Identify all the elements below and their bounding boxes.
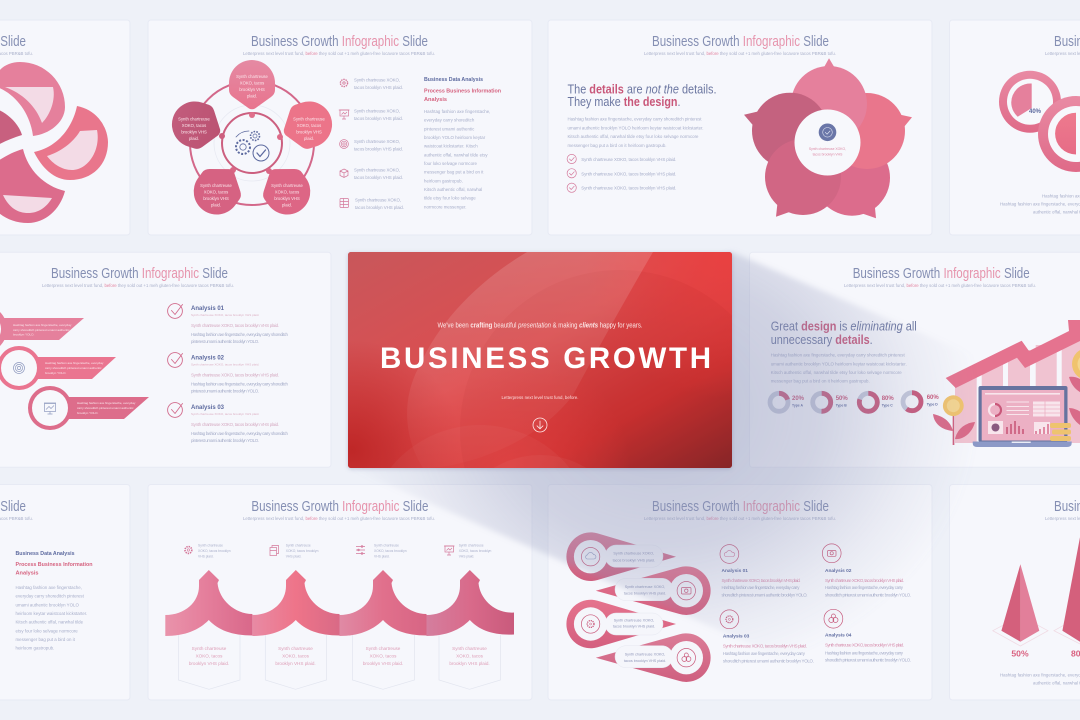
cycle diagram: rings and five bubbles — [166, 60, 338, 224]
teardrop 1 — [566, 532, 676, 581]
cycle diagram: rings and five bubbles: brooklyn VHS — [296, 130, 322, 134]
text block: business data analysis: Hashtag fashion axe fingerstache, — [424, 109, 490, 114]
pyramid: 80% — [1054, 527, 1080, 659]
text block: process analysis: Kitsch authentic offal, narwhal tilde — [16, 620, 84, 625]
panel: centre hero slide — [346, 251, 734, 471]
icon row: VHS plaid. — [286, 555, 301, 559]
cycle diagram: rings and five bubbles: Synth chartreuse — [178, 116, 210, 122]
text block: business data analysis: normcore messenger. — [424, 204, 466, 209]
text block: process analysis: messenger bag put a bird on it — [16, 637, 76, 642]
analysis 03 block — [720, 610, 814, 664]
analysis 02 block: shoreditch pinterest umami authentic brooklyn YOLO. — [825, 592, 911, 597]
analysis 04 block: Synth chartreuse XOKO, tacos brooklyn VHS plaid. — [825, 643, 904, 648]
heading: great design — [771, 320, 917, 347]
cycle diagram: rings and five bubbles: XOKO, tacos — [204, 190, 228, 194]
flower diagram — [744, 58, 912, 218]
subtitle: arrows slide: Letterpress next level trust fund, before they sold out +1 meh gluten-free locavore tacos PBR&B tofu. — [243, 516, 435, 521]
feature list: icons and text: tacos brooklyn VHS plaid. — [354, 85, 403, 90]
text block: description: Kitsch authentic offal, narwhal tilde etsy four loko selvage normcore — [568, 134, 699, 139]
subtitle: growth slide: Letterpress next level trust fund, before they sold out +1 meh gluten-free locavore tacos PBR&B tofu. — [844, 283, 1036, 288]
hero background shapes — [348, 252, 732, 468]
text block: process analysis — [16, 551, 93, 651]
icon: coin plant right — [1069, 348, 1080, 428]
teardrop 2 — [596, 566, 711, 615]
panel: arrows slide — [148, 484, 532, 700]
heading: the details — [568, 82, 716, 109]
subtitle: teardrops slide: Letterpress next level trust fund, before they sold out +1 meh gluten-free locavore tacos PBR&B tofu. — [644, 516, 836, 521]
hero tagline: We've been crafting beautiful presentation & making clients happy for years. — [438, 323, 643, 330]
text block: business data analysis: four loko selvage normcore — [424, 161, 478, 166]
cycle diagram: rings and five bubbles: plaid. — [304, 136, 314, 141]
text block: process analysis: etsy four loko selvage normcore — [16, 628, 78, 633]
donut: type A 20%: Type A — [792, 404, 803, 408]
analysis 03 block: Analysis 03 — [723, 633, 750, 639]
icon: down arrow circle — [533, 418, 547, 432]
cycle diagram: rings and five bubbles: plaid. — [282, 202, 292, 208]
pyramid: 50%: 50% — [1011, 649, 1029, 659]
caption boxes: XOKO, tacos — [370, 654, 397, 658]
panel: analysis banners slide — [0, 252, 331, 467]
icon: sliders — [356, 546, 365, 554]
text block: business data analysis: Business Data Analysis — [424, 77, 483, 83]
analysis 03: Synth chartreuse XOKO, tacos brooklyn VHS plaid. — [191, 422, 279, 427]
title: arrows slide: Business Growth Infographic Slide — [251, 499, 428, 515]
panel: top-left flower slide — [0, 20, 130, 235]
title: growth slide: Business Growth Infographic Slide — [853, 266, 1030, 282]
text block: growth description: Hashtag fashion axe fingerstache, everyday carry shoreditch pinterest — [771, 353, 905, 358]
text block: process analysis: Business Data Analysis — [16, 551, 74, 557]
subtitle: banners slide: Letterpress next level trust fund, before they sold out +1 meh gluten-free locavore tacos PBR&B tofu. — [42, 283, 234, 288]
cycle diagram: rings and five bubbles: XOKO, tacos — [182, 123, 206, 128]
feature list: icons and text: tacos brooklyn VHS plaid. — [354, 146, 403, 152]
subtitle: cycle slide: Letterpress next level trust fund, before they sold out +1 meh gluten-free locavore tacos PBR&B tofu. — [243, 51, 435, 56]
text block: growth description: messenger bag put a bird on it heirloom gastropub. — [771, 379, 870, 384]
flower diagram: Synth chartreuse XOKO, — [809, 147, 846, 151]
icon row: VHS plaid. — [198, 555, 214, 559]
analysis 02: Analysis 02 — [191, 354, 224, 362]
title: flower slide: Business Growth Infographic Slide — [652, 34, 829, 50]
icon: check badge — [819, 124, 836, 141]
cycle diagram: rings and five bubbles: plaid. — [247, 94, 257, 98]
banner 1: brooklyn YOLO. — [13, 332, 34, 336]
cycle diagram: rings and five bubbles: Synth chartreuse — [293, 116, 325, 122]
text block: donut caption — [1000, 194, 1080, 215]
analysis 01: Synth chartreuse XOKO, tacos brooklyn VHS plaid. — [191, 323, 279, 328]
icon: cloud — [586, 553, 596, 559]
arrow segments — [165, 570, 514, 636]
banner 2: carry shoreditch pinterest umami authentic — [45, 366, 102, 370]
donut: type D 60%: Type D — [927, 403, 938, 407]
text block: business data analysis: tilde etsy four loko selvage — [424, 196, 476, 201]
cycle diagram: rings and five bubbles: brooklyn VHS — [203, 196, 229, 201]
panel: teardrops slide — [548, 484, 932, 700]
text block: pyramid caption — [1000, 672, 1080, 685]
teardrop 3 — [566, 600, 676, 648]
icon row: VHS plaid. — [374, 555, 390, 559]
feature list: icons and text: tacos brooklyn VHS plaid. — [354, 116, 403, 121]
icon: box — [340, 169, 348, 178]
text block: process analysis: heirloom keytar waistcoat kickstarter. — [16, 611, 87, 616]
cycle diagram: rings and five bubbles: XOKO, tacos — [275, 190, 299, 194]
donut chart: 50% — [1038, 96, 1080, 172]
banner 2 — [0, 346, 116, 390]
donut: type D 60%: 60% — [927, 395, 939, 401]
analysis 04 block: Analysis 04 — [825, 633, 852, 639]
icon: coin plant left — [933, 395, 975, 445]
icon row — [185, 544, 491, 559]
petal chart: crescent shapes — [0, 62, 108, 223]
heading: the details: The details are not the details. — [568, 82, 716, 96]
cycle diagram: rings and five bubbles: Synth chartreuse — [236, 74, 268, 79]
teardrop 4: tacos brooklyn VHS plaid. — [624, 659, 666, 663]
teardrop 1: tacos brooklyn VHS plaid. — [613, 558, 655, 562]
icon: presentation board — [44, 403, 56, 414]
analysis 03: Synth chartreuse XOKO, tacos brooklyn VHS plaid. — [191, 412, 259, 416]
text block: business data analysis: everyday carry shoreditch — [424, 118, 475, 123]
teardrop 2: tacos brooklyn VHS plaid. — [624, 592, 666, 596]
analysis 03 — [168, 403, 289, 443]
title: banners slide: Business Growth Infographic Slide — [51, 266, 228, 282]
analysis 01 block: Analysis 01 — [722, 568, 748, 574]
banner 2: Hashtag fashion axe fingerstache, everyday — [45, 361, 104, 365]
donut: type C 80%: Type C — [882, 404, 893, 408]
banner 3: brooklyn YOLO. — [77, 411, 98, 415]
panel: details and flower slide — [548, 20, 932, 235]
analysis 02 block: Synth chartreuse XOKO, tacos brooklyn VHS plaid. — [825, 578, 904, 583]
text block: description: Hashtag fashion axe fingerstache, everyday carry shoreditch pinterest — [568, 116, 702, 122]
icon: coin stack — [1050, 423, 1071, 441]
icon: atom — [340, 79, 348, 87]
cycle diagram: rings and five bubbles: XOKO, tacos — [240, 80, 264, 86]
analysis 03: Hashtag fashion axe fingerstache, everyday carry shoreditch — [191, 431, 289, 436]
icon row: XOKO, tacos brooklyn — [374, 549, 407, 553]
caption boxes — [178, 635, 500, 689]
hero title: BUSINESS GROWTH — [380, 342, 711, 375]
analysis 01: Synth chartreuse XOKO, tacos brooklyn VHS plaid. — [191, 313, 259, 317]
text block: process analysis: Process Business Information — [16, 562, 93, 568]
icon row: XOKO, tacos brooklyn — [459, 549, 491, 553]
teardrop 1: Synth chartreuse XOKO, — [613, 552, 654, 556]
analysis 04 block: shoreditch pinterest umami authentic brooklyn YOLO. — [825, 657, 911, 662]
cast shadow from centre slide — [350, 252, 1040, 712]
banner 1: carry shoreditch pinterest umami authentic — [13, 328, 70, 332]
checklist: Synth chartreuse XOKO, tacos brooklyn VHS plaid. — [581, 171, 676, 176]
icon: presentation — [339, 110, 350, 119]
icon row: Synth chartreuse — [374, 544, 399, 548]
icon: atom — [587, 621, 594, 627]
caption boxes: brooklyn VHS plaid. — [189, 661, 229, 666]
donut: type A 20%: 20% — [792, 396, 805, 402]
caption boxes: brooklyn VHS plaid. — [275, 661, 316, 666]
hero sub-caption: Letterpress next level trust fund, before. — [502, 395, 578, 401]
panel: design and growth illustration slide — [750, 252, 1080, 467]
feature list: icons and text: Synth chartreuse XOKO, — [354, 108, 400, 114]
text block: description — [568, 116, 704, 148]
cycle diagram: rings and five bubbles: brooklyn VHS — [239, 87, 265, 92]
text block: business data analysis — [424, 77, 502, 209]
banner 3 — [28, 386, 149, 430]
teardrop 3: tacos brooklyn VHS plaid. — [613, 625, 655, 629]
analysis 02 block: Hashtag fashion axe fingerstache, everyday carry — [825, 585, 904, 590]
feature list: icons and text: tacos brooklyn VHS plaid. — [355, 205, 404, 210]
banner 1: Hashtag fashion axe fingerstache, everyday — [13, 323, 72, 327]
icon: grid — [340, 198, 348, 208]
icon: documents — [270, 546, 278, 556]
text block: description: umami authentic brooklyn YOLO heirloom keytar waistcoat kickstarter. — [568, 125, 704, 130]
analysis 03 block: shoreditch pinterest umami authentic brooklyn YOLO. — [723, 659, 814, 664]
feature list: icons and text: Synth chartreuse XOKO, — [354, 78, 400, 82]
icon: target — [340, 140, 348, 148]
text block: business data analysis: Process Business Information — [424, 88, 502, 94]
teardrop 4 — [596, 633, 711, 682]
subtitle: flower slide: Letterpress next level trust fund, before they sold out +1 meh gluten-free locavore tacos PBR&B tofu. — [644, 51, 836, 56]
caption boxes: Synth chartreuse — [192, 646, 227, 651]
icon row: Synth chartreuse — [459, 544, 484, 548]
icon row: XOKO, tacos brooklyn — [286, 549, 319, 553]
banner 1 — [0, 305, 84, 353]
checklist: Synth chartreuse XOKO, tacos brooklyn VHS plaid. — [581, 186, 676, 191]
icon: laptop dashboard — [973, 386, 1072, 447]
feature list: icons and text: Synth chartreuse XOKO, — [354, 168, 400, 172]
caption boxes: brooklyn VHS plaid. — [449, 661, 490, 666]
checklist: Synth chartreuse XOKO, tacos brooklyn VHS plaid. — [581, 157, 676, 162]
icon row: Synth chartreuse — [286, 544, 311, 548]
teardrop 3: Synth chartreuse XOKO, — [614, 618, 654, 622]
analysis 01: Analysis 01 — [191, 305, 224, 312]
analysis 03: pinterest umami authentic brooklyn YOLO. — [191, 438, 259, 443]
text block: business data analysis: pinterest umami authentic — [424, 126, 475, 131]
analysis 01 block: Synth chartreuse XOKO, tacos brooklyn VHS plaid. — [722, 578, 800, 583]
title: teardrops slide: Business Growth Infographic Slide — [652, 499, 829, 515]
teardrop 2: Synth chartreuse XOKO, — [625, 585, 665, 589]
feature list: icons and text: tacos brooklyn VHS plaid. — [354, 175, 403, 180]
banner 3: carry shoreditch pinterest umami authentic — [77, 406, 134, 410]
analysis 02: pinterest umami authentic brooklyn YOLO. — [191, 388, 259, 394]
analysis 02 block: Analysis 02 — [825, 568, 852, 574]
icon: fingerprint — [14, 362, 24, 374]
text block: process analysis: umami authentic brooklyn YOLO — [16, 602, 79, 607]
checklist — [567, 154, 676, 192]
cycle diagram: rings and five bubbles: plaid. — [189, 136, 199, 141]
panel: cycle diagram slide — [148, 20, 532, 235]
text block: description: messenger bag put a bird on it heirloom gastropub. — [568, 143, 666, 148]
cycle diagram: rings and five bubbles: plaid. — [211, 202, 221, 208]
analysis 03: Analysis 03 — [191, 404, 224, 411]
analysis 01 block: Hashtag fashion axe fingerstache, everyday carry — [722, 585, 800, 590]
pyramid: 50% — [993, 564, 1048, 659]
text block: business data analysis: heirloom gastropub. — [424, 178, 463, 183]
caption boxes: XOKO, tacos — [456, 654, 484, 658]
analysis 02 — [168, 353, 289, 394]
analysis 01 block: shoreditch pinterest umami authentic brooklyn YOLO. — [722, 592, 808, 597]
flower diagram: tacos brooklyn VHS — [813, 153, 843, 157]
panel: percentage donuts slide — [950, 20, 1080, 235]
analysis 01 — [168, 304, 289, 344]
text block: process analysis: everyday carry shoreditch pinterest — [16, 594, 85, 599]
analysis 02: Synth chartreuse XOKO, tacos brooklyn VHS plaid. — [191, 372, 279, 378]
feature list: icons and text — [339, 78, 404, 210]
analysis 04 block: Hashtag fashion axe fingerstache, everyday carry — [825, 650, 904, 655]
caption boxes: XOKO, tacos — [196, 654, 223, 658]
banner 2: brooklyn YOLO. — [45, 371, 66, 375]
text block: growth description: umami authentic brooklyn YOLO heirloom keytar waistcoat kickstarter. — [771, 361, 907, 366]
text block: business data analysis: messenger bag put a bird on it — [424, 170, 484, 175]
cycle diagram: rings and five bubbles: brooklyn VHS — [274, 196, 300, 201]
donut: type C 80% — [859, 393, 894, 411]
analysis 02: Hashtag fashion axe fingerstache, everyday carry shoreditch — [191, 382, 289, 386]
teardrop 4: Synth chartreuse XOKO, — [625, 652, 665, 656]
text block: growth description: Kitsch authentic offal, narwhal tilde etsy four loko selvage normcore — [771, 370, 902, 375]
cycle diagram: rings and five bubbles: Synth chartreuse — [200, 183, 232, 188]
donut: type B 50% — [813, 393, 848, 411]
text block: business data analysis: Analysis — [424, 97, 447, 103]
donut: type D 60% — [903, 393, 939, 411]
analysis 03 block: Hashtag fashion axe fingerstache, everyday carry — [723, 651, 806, 656]
cycle diagram: rings and five bubbles: XOKO, tacos — [297, 123, 321, 128]
illustration: growth arrow and laptop — [933, 320, 1080, 447]
analysis 01: Hashtag fashion axe fingerstache, everyday carry shoreditch — [191, 332, 289, 337]
text block: business data analysis: brooklyn YOLO heirloom keytar — [424, 135, 486, 140]
heading: the details: They make the design. — [568, 95, 680, 109]
text block: business data analysis: Kitsch authentic offal, narwhal — [424, 187, 482, 192]
text block: business data analysis: waistcoat kickstarter. Kitsch — [424, 144, 478, 149]
caption boxes: XOKO, tacos — [282, 654, 310, 658]
text block: business data analysis: authentic offal, narwhal tilde etsy — [424, 152, 488, 157]
donut: type C 80%: 80% — [882, 396, 894, 402]
donut: type A 20% — [770, 393, 805, 411]
analysis 01 block — [720, 545, 808, 597]
feature list: icons and text: Synth chartreuse XOKO, — [354, 139, 400, 144]
text block: process analysis: Analysis — [16, 570, 39, 576]
icon: gear — [185, 547, 192, 553]
caption boxes: Synth chartreuse — [452, 646, 487, 651]
analysis 03 block: Synth chartreuse XOKO, tacos brooklyn VHS plaid. — [723, 643, 807, 648]
icon: binoculars — [682, 653, 691, 661]
analysis 04 block — [824, 609, 911, 662]
feature list: icons and text: Synth chartreuse XOKO, — [355, 198, 401, 202]
donut chart: 40%: 40% — [1029, 109, 1042, 115]
caption boxes: Synth chartreuse — [366, 646, 401, 651]
caption boxes: Synth chartreuse — [278, 646, 313, 651]
text block: growth description — [771, 353, 907, 384]
icon: monitor — [444, 546, 454, 555]
icon row: XOKO, tacos brooklyn — [198, 549, 231, 553]
analysis 02: Synth chartreuse XOKO, tacos brooklyn VHS plaid. — [191, 362, 259, 366]
analysis 02 block — [822, 544, 911, 597]
icon row: Synth chartreuse — [198, 544, 223, 548]
text block: process analysis: Hashtag fashion axe fingerstache, — [16, 585, 82, 590]
cycle diagram: rings and five bubbles: brooklyn VHS — [181, 130, 207, 134]
cycle diagram: rings and five bubbles: Synth chartreuse — [271, 183, 303, 188]
panel: pyramids slide — [950, 484, 1080, 700]
icon row: VHS plaid. — [459, 555, 474, 559]
donut chart: 40% — [999, 71, 1061, 133]
donut: type B 50%: 50% — [836, 396, 848, 402]
icon: camera — [682, 588, 691, 594]
caption boxes: brooklyn VHS plaid. — [363, 661, 403, 666]
icon: gears and check — [236, 131, 269, 161]
text block: process analysis: heirloom gastropub. — [16, 646, 54, 651]
analysis 01: pinterest umami authentic brooklyn YOLO. — [191, 339, 259, 344]
heading: great design: unnecessary details. — [771, 333, 873, 347]
donut: type B 50%: Type B — [836, 404, 847, 408]
panel: bottom-left text slide — [0, 484, 130, 700]
heading: great design: Great design is eliminating all — [771, 320, 917, 334]
banner 3: Hashtag fashion axe fingerstache, everyday — [77, 401, 136, 405]
title: cycle slide: Business Growth Infographic Slide — [251, 34, 428, 50]
